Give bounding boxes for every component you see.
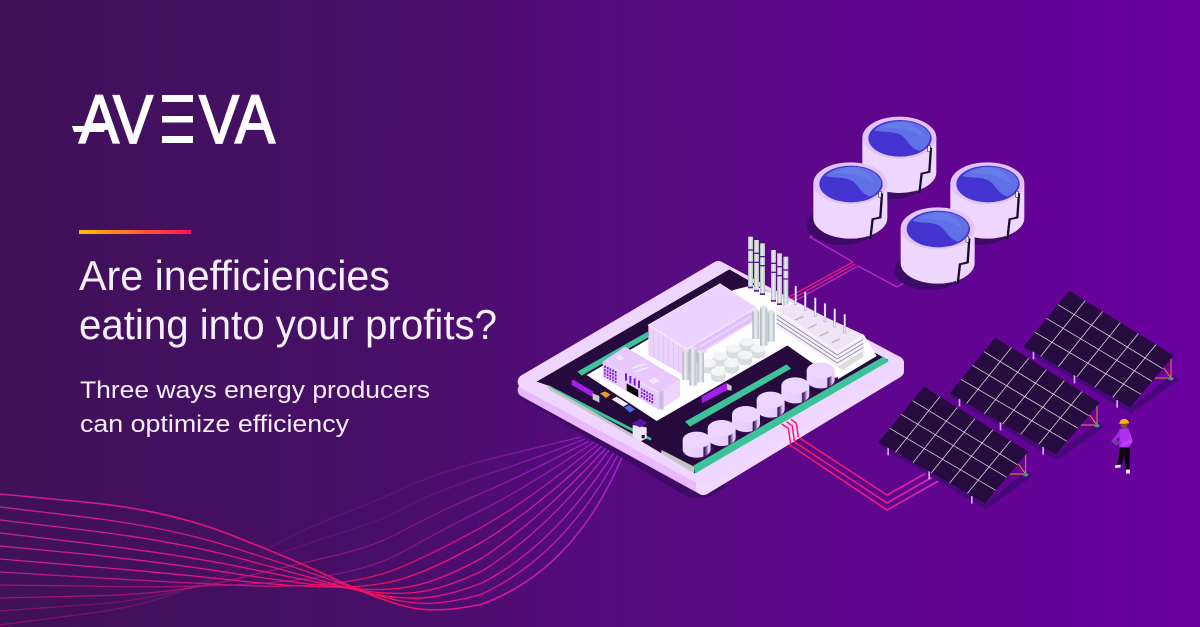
tank: front	[894, 207, 975, 290]
solar panel: front	[878, 387, 1034, 509]
green strip: inner top	[577, 332, 648, 376]
car: blue	[624, 405, 635, 413]
solar panel: middle	[950, 338, 1105, 460]
grey pad shadow	[837, 351, 863, 370]
subheading: Three ways energy producers	[80, 377, 430, 404]
road marking	[612, 397, 628, 407]
small process tanks	[701, 337, 766, 382]
wave lines flowing from platform	[0, 437, 623, 625]
worker with hard hat and tablet	[1111, 419, 1133, 474]
large storage tanks	[683, 362, 838, 461]
logo: AVEVA: AVEVA	[79, 80, 275, 158]
grey wall and green strip: front left	[548, 385, 694, 473]
small roof stacks	[795, 286, 846, 333]
white yard	[587, 285, 877, 421]
heading: eating into your profits?	[79, 301, 497, 348]
industrial plant platform	[518, 237, 897, 497]
gatehouse	[632, 419, 647, 442]
green strip: inner middle	[685, 364, 791, 427]
subheading: can optimize efficiency	[80, 411, 350, 438]
green strip: front right	[693, 357, 889, 473]
solar panels	[878, 291, 1179, 509]
tank: left	[807, 162, 887, 245]
platform top surface	[525, 268, 897, 478]
smoke stacks	[748, 237, 788, 307]
warehouse	[648, 284, 757, 377]
connector lines: tanks to plant	[787, 230, 912, 302]
oil storage tanks	[807, 117, 1024, 290]
office building	[603, 347, 680, 410]
connector lines: plant to solar panels	[782, 419, 942, 510]
accent rule	[79, 230, 191, 234]
truck: left	[572, 380, 599, 403]
dark road surface	[537, 269, 888, 473]
platform shadow	[518, 380, 727, 497]
silos right	[752, 306, 775, 346]
subheading	[80, 377, 430, 438]
heading: Are inefficiencies	[79, 252, 390, 299]
right process building	[777, 303, 863, 367]
heading	[79, 252, 497, 348]
solar panel: back	[1024, 291, 1179, 413]
tank: back	[856, 117, 936, 199]
platform side	[525, 276, 897, 488]
silos left	[682, 347, 704, 386]
car: orange	[600, 391, 611, 398]
pink connector entering platform	[782, 419, 798, 444]
tank: right	[944, 162, 1024, 245]
truck: right	[702, 383, 732, 403]
